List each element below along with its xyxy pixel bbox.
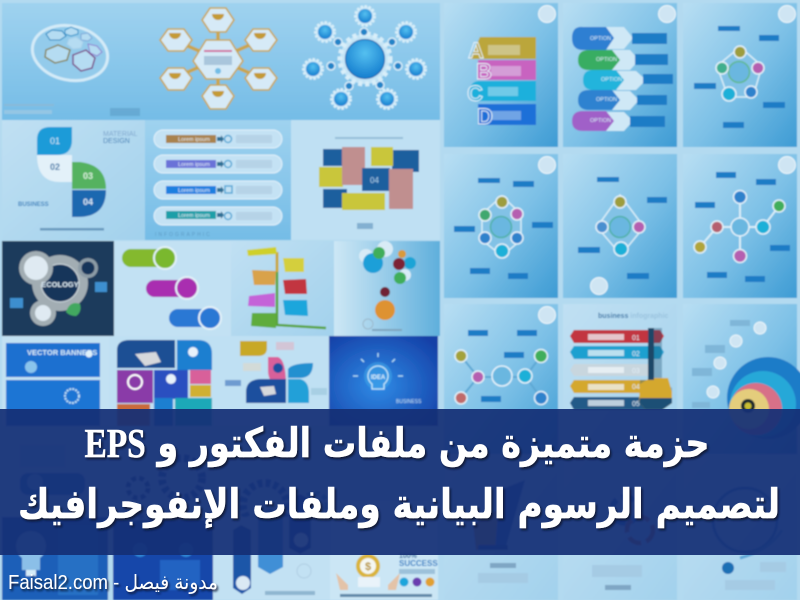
panel: isometric hexagon disc <box>2 3 145 120</box>
panel: material design quarter leaves: BUSINESS <box>18 202 49 208</box>
panel: material design quarter leaves <box>2 120 145 240</box>
watermark: site credit: Faisal2.com - مدونة فيصل <box>8 572 218 594</box>
panel: hub and spoke network <box>683 154 797 298</box>
panel: blue gear hub <box>292 3 440 120</box>
panel: question mark of circles <box>334 241 440 336</box>
panel: success money: 100% <box>399 553 418 560</box>
panel: success money: SUCCESS <box>399 559 438 568</box>
panel: success money <box>330 500 438 600</box>
panel: ecology dark: ECOLOGY <box>41 280 79 289</box>
panel: coloured cards <box>291 120 440 240</box>
panel: key shaped business infographic <box>563 304 677 454</box>
panel: gears (under banner) <box>109 426 329 545</box>
panel: option arrows: OPTION <box>601 77 622 83</box>
panel: material design quarter leaves: DESIGN <box>103 138 130 145</box>
panel: blue square A B C D: C <box>467 81 483 106</box>
dark title banner <box>0 409 800 555</box>
panel: key shaped business infographic: 03 <box>632 368 640 375</box>
panel: lorem ipsum pill list: Lorem ipsum <box>178 213 210 219</box>
panel: material design quarter leaves: 02 <box>50 162 60 172</box>
panel: option arrows: OPTION <box>590 36 611 42</box>
panel: vector banners: VECTOR BANNERS <box>27 348 97 357</box>
panel: key shaped business infographic: 01 <box>632 335 640 342</box>
panel: blue square A B C D <box>444 3 558 147</box>
panel: branch network <box>444 304 558 454</box>
panel: handshake blocks <box>109 336 220 426</box>
panel: key shaped business infographic: 04 <box>632 384 640 391</box>
panel: material design quarter leaves: 03 <box>83 171 93 181</box>
panel: key shaped business infographic: business infographic <box>598 313 669 320</box>
panel: lower row right <box>683 454 797 600</box>
panel: lorem ipsum pill list: Lorem ipsum <box>178 137 210 143</box>
panel: petal icons infographic <box>220 336 329 426</box>
panel: key shaped business infographic: 02 <box>632 351 640 358</box>
panel: option arrows: OPTION <box>596 57 617 63</box>
panel: material design quarter leaves: 04 <box>83 197 93 207</box>
panel: gold hexagon network <box>145 3 292 120</box>
panel: option arrows <box>563 3 677 147</box>
panel: material design quarter leaves: MATERIAL <box>103 131 138 138</box>
panel: vector banners <box>2 336 109 426</box>
panel: lorem ipsum pill list: INFOGRAPHIC <box>155 232 212 238</box>
panel: dark blue business people <box>113 520 213 600</box>
panel: coloured cards: 04 <box>370 176 379 185</box>
panel: option arrows: OPTION <box>596 97 617 103</box>
panel: lower row left <box>444 454 558 600</box>
panel: five-node pentagon <box>683 3 797 147</box>
panel: four-node ring <box>563 154 677 298</box>
panel: ecology dark <box>2 241 114 336</box>
panel: blue idea bulb: BUSINESS <box>396 399 422 405</box>
panel: timeline paper notes <box>231 241 334 336</box>
panel: blue idea bulb: IDEA <box>371 375 386 381</box>
panel: lorem ipsum pill list <box>145 120 291 240</box>
panel: material design quarter leaves: 01 <box>50 136 60 146</box>
panel: lorem ipsum pill list: Lorem ipsum <box>178 162 210 168</box>
panel: key shaped business infographic: 05 <box>632 401 640 408</box>
panel: lower row middle <box>563 454 677 600</box>
panel: hex ribbons vector banners <box>213 494 330 600</box>
panel: blue square A B C D: A <box>468 38 484 63</box>
panel: bulb with icons <box>2 517 108 600</box>
panel: three coloured pills <box>114 241 231 336</box>
panel: blue square A B C D: D <box>477 104 493 129</box>
panel: business infographic gears (under banner) <box>2 426 109 516</box>
panel: concentric funnel <box>683 304 800 454</box>
panel: blue idea bulb <box>329 336 438 426</box>
panel: lorem ipsum pill list: Lorem ipsum <box>178 188 210 194</box>
panel: option arrows: OPTION <box>590 118 611 124</box>
panel: success money: $ <box>365 561 371 573</box>
panel: blue square A B C D: B <box>476 59 492 84</box>
panel: six-node ring <box>444 154 558 298</box>
